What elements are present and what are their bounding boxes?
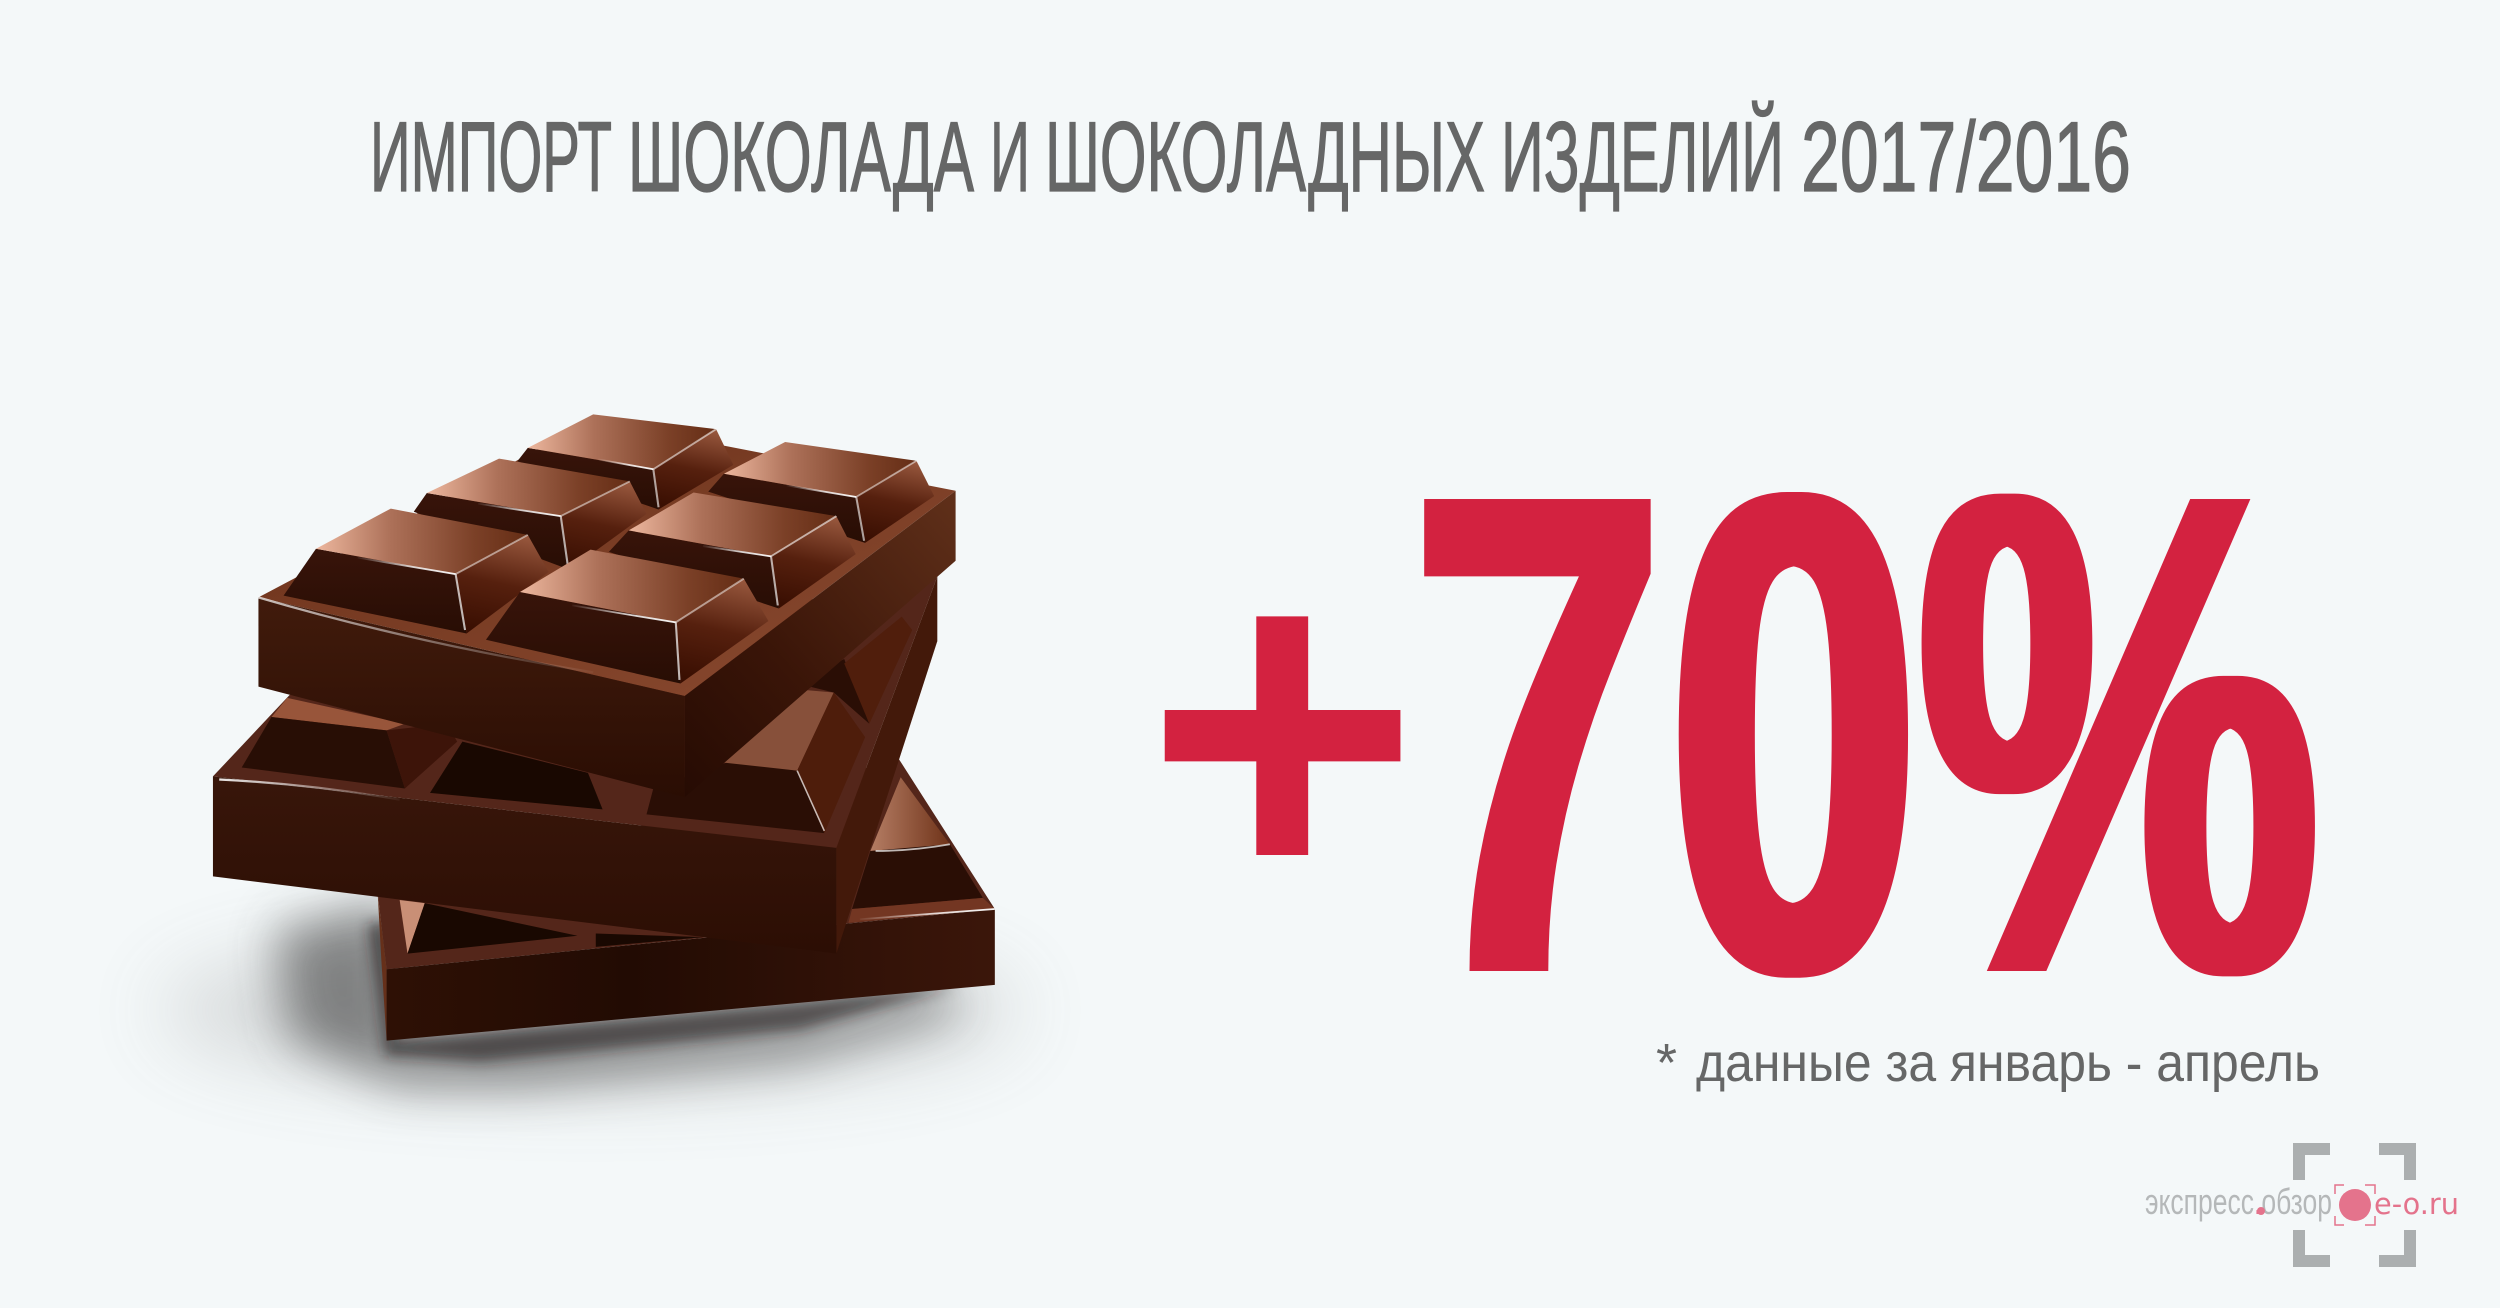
title: 2017/2016 — [1801, 101, 2131, 212]
logo dot — [2257, 1207, 2265, 1215]
block: back left — [517, 414, 733, 509]
illustration: stack of chocolate bars — [160, 414, 1020, 1085]
title: ИМПОРТ — [370, 101, 612, 212]
title: И — [990, 101, 1030, 212]
bottom chocolate bar — [378, 759, 995, 1041]
block: middle right — [609, 492, 856, 609]
big number: +70% — [1145, 351, 2320, 1117]
block: centre — [430, 742, 603, 809]
soft shadow under chocolate — [160, 900, 1020, 1085]
logo: экспресс обзор e-o.ru — [2145, 1149, 2459, 1261]
title: ШОКОЛАДНЫХ — [1045, 101, 1485, 212]
logo small pink corners — [2335, 1185, 2375, 1225]
70 percent: 7 — [1412, 351, 1664, 1117]
title — [370, 101, 2131, 212]
middle chocolate bar — [213, 576, 937, 954]
title: ИЗДЕЛИЙ — [1501, 101, 1784, 212]
footnote: * — [1656, 1033, 1677, 1093]
70 percent: 0 — [1668, 351, 1920, 1117]
70 percent — [1412, 351, 2320, 1117]
top chocolate bar — [258, 414, 956, 797]
logo text: экспресс обзор: экспресс.обзор — [2145, 1181, 2332, 1222]
block: left — [242, 698, 457, 788]
title: ШОКОЛАДА — [628, 101, 974, 212]
block: middle left — [414, 459, 647, 570]
block: back right — [708, 442, 934, 543]
footnote: данные за январь - апрель — [1696, 1033, 2320, 1093]
block: upper right — [797, 617, 912, 724]
logo text: e-o.ru: e-o.ru — [2374, 1187, 2459, 1221]
logo circle — [2339, 1189, 2371, 1221]
70 percent: % — [1917, 351, 2320, 1117]
block: right — [647, 688, 865, 833]
block: front right — [486, 550, 768, 684]
block: front left — [284, 509, 549, 634]
plus sign: + — [1145, 467, 1419, 992]
logo viewfinder corners — [2299, 1149, 2410, 1261]
